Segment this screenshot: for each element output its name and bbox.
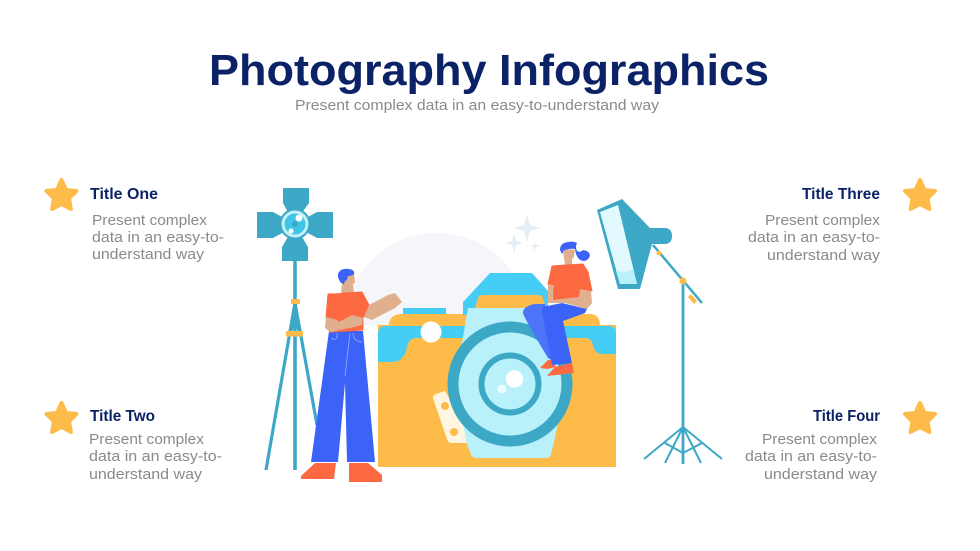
shirt — [548, 264, 592, 300]
shirt — [326, 292, 369, 332]
subtitle: Present complex data in an easy-to-understand way — [295, 98, 660, 114]
text block: title four: Title Four — [813, 408, 880, 425]
background circle — [345, 233, 529, 325]
stand pole — [682, 283, 684, 464]
star icon: title two — [46, 403, 76, 432]
text block: title three: understand way — [767, 248, 881, 264]
text block: title four: data in an easy-to- — [745, 449, 877, 465]
shoes — [301, 463, 336, 479]
text block: title four — [745, 408, 880, 483]
head and neck — [563, 249, 575, 266]
blue trim right — [560, 326, 616, 354]
ponytail and hair — [560, 242, 590, 261]
text block: title two: Present complex — [89, 432, 205, 448]
text block: title one: data in an easy-to- — [92, 230, 224, 246]
woman figure — [523, 242, 592, 376]
boom arm — [653, 245, 702, 303]
text block: title one: Title One — [90, 186, 158, 203]
softbox light stand — [597, 199, 722, 464]
lens rings — [453, 327, 567, 441]
blue trim left — [378, 326, 475, 362]
text block: title one — [90, 186, 224, 263]
softbox panel — [600, 205, 637, 284]
camera — [378, 273, 616, 467]
hair — [338, 269, 354, 284]
text block: title two: data in an easy-to- — [89, 449, 222, 465]
text block: title two: understand way — [89, 467, 203, 483]
man figure — [301, 269, 402, 482]
text block: title four: understand way — [764, 467, 878, 483]
camera body — [378, 325, 616, 467]
text block: title four: Present complex — [762, 432, 878, 448]
neck and head — [341, 272, 355, 294]
text block: title two — [89, 408, 222, 483]
text block: title three: Present complex — [765, 213, 881, 229]
star icon: title four — [905, 403, 935, 432]
shutter button — [420, 322, 442, 342]
camera grip label — [433, 391, 475, 443]
arms — [325, 315, 363, 332]
text block: title one: understand way — [92, 247, 205, 263]
tripod base — [644, 427, 722, 463]
softbox shell — [597, 199, 672, 289]
title: Photography Infographics — [209, 46, 769, 95]
pants — [311, 331, 375, 462]
legs — [523, 304, 556, 361]
text block: title three — [748, 186, 881, 264]
boom fittings — [656, 250, 662, 256]
text block: title two: Title Two — [90, 408, 155, 425]
prism — [463, 273, 548, 315]
arm — [548, 285, 592, 309]
camera top button — [403, 308, 446, 315]
text block: title three: Title Three — [802, 186, 880, 203]
sparkles — [505, 214, 541, 253]
shoes — [540, 360, 556, 369]
lens highlights — [506, 370, 523, 388]
star icon: title one — [46, 180, 76, 209]
camera upper body — [389, 314, 600, 326]
lens plate — [455, 308, 565, 458]
star icon: title three — [905, 180, 935, 209]
text block: title three: data in an easy-to- — [748, 230, 880, 246]
light stand with lamp — [257, 188, 333, 470]
text block: title one: Present complex — [92, 213, 208, 229]
